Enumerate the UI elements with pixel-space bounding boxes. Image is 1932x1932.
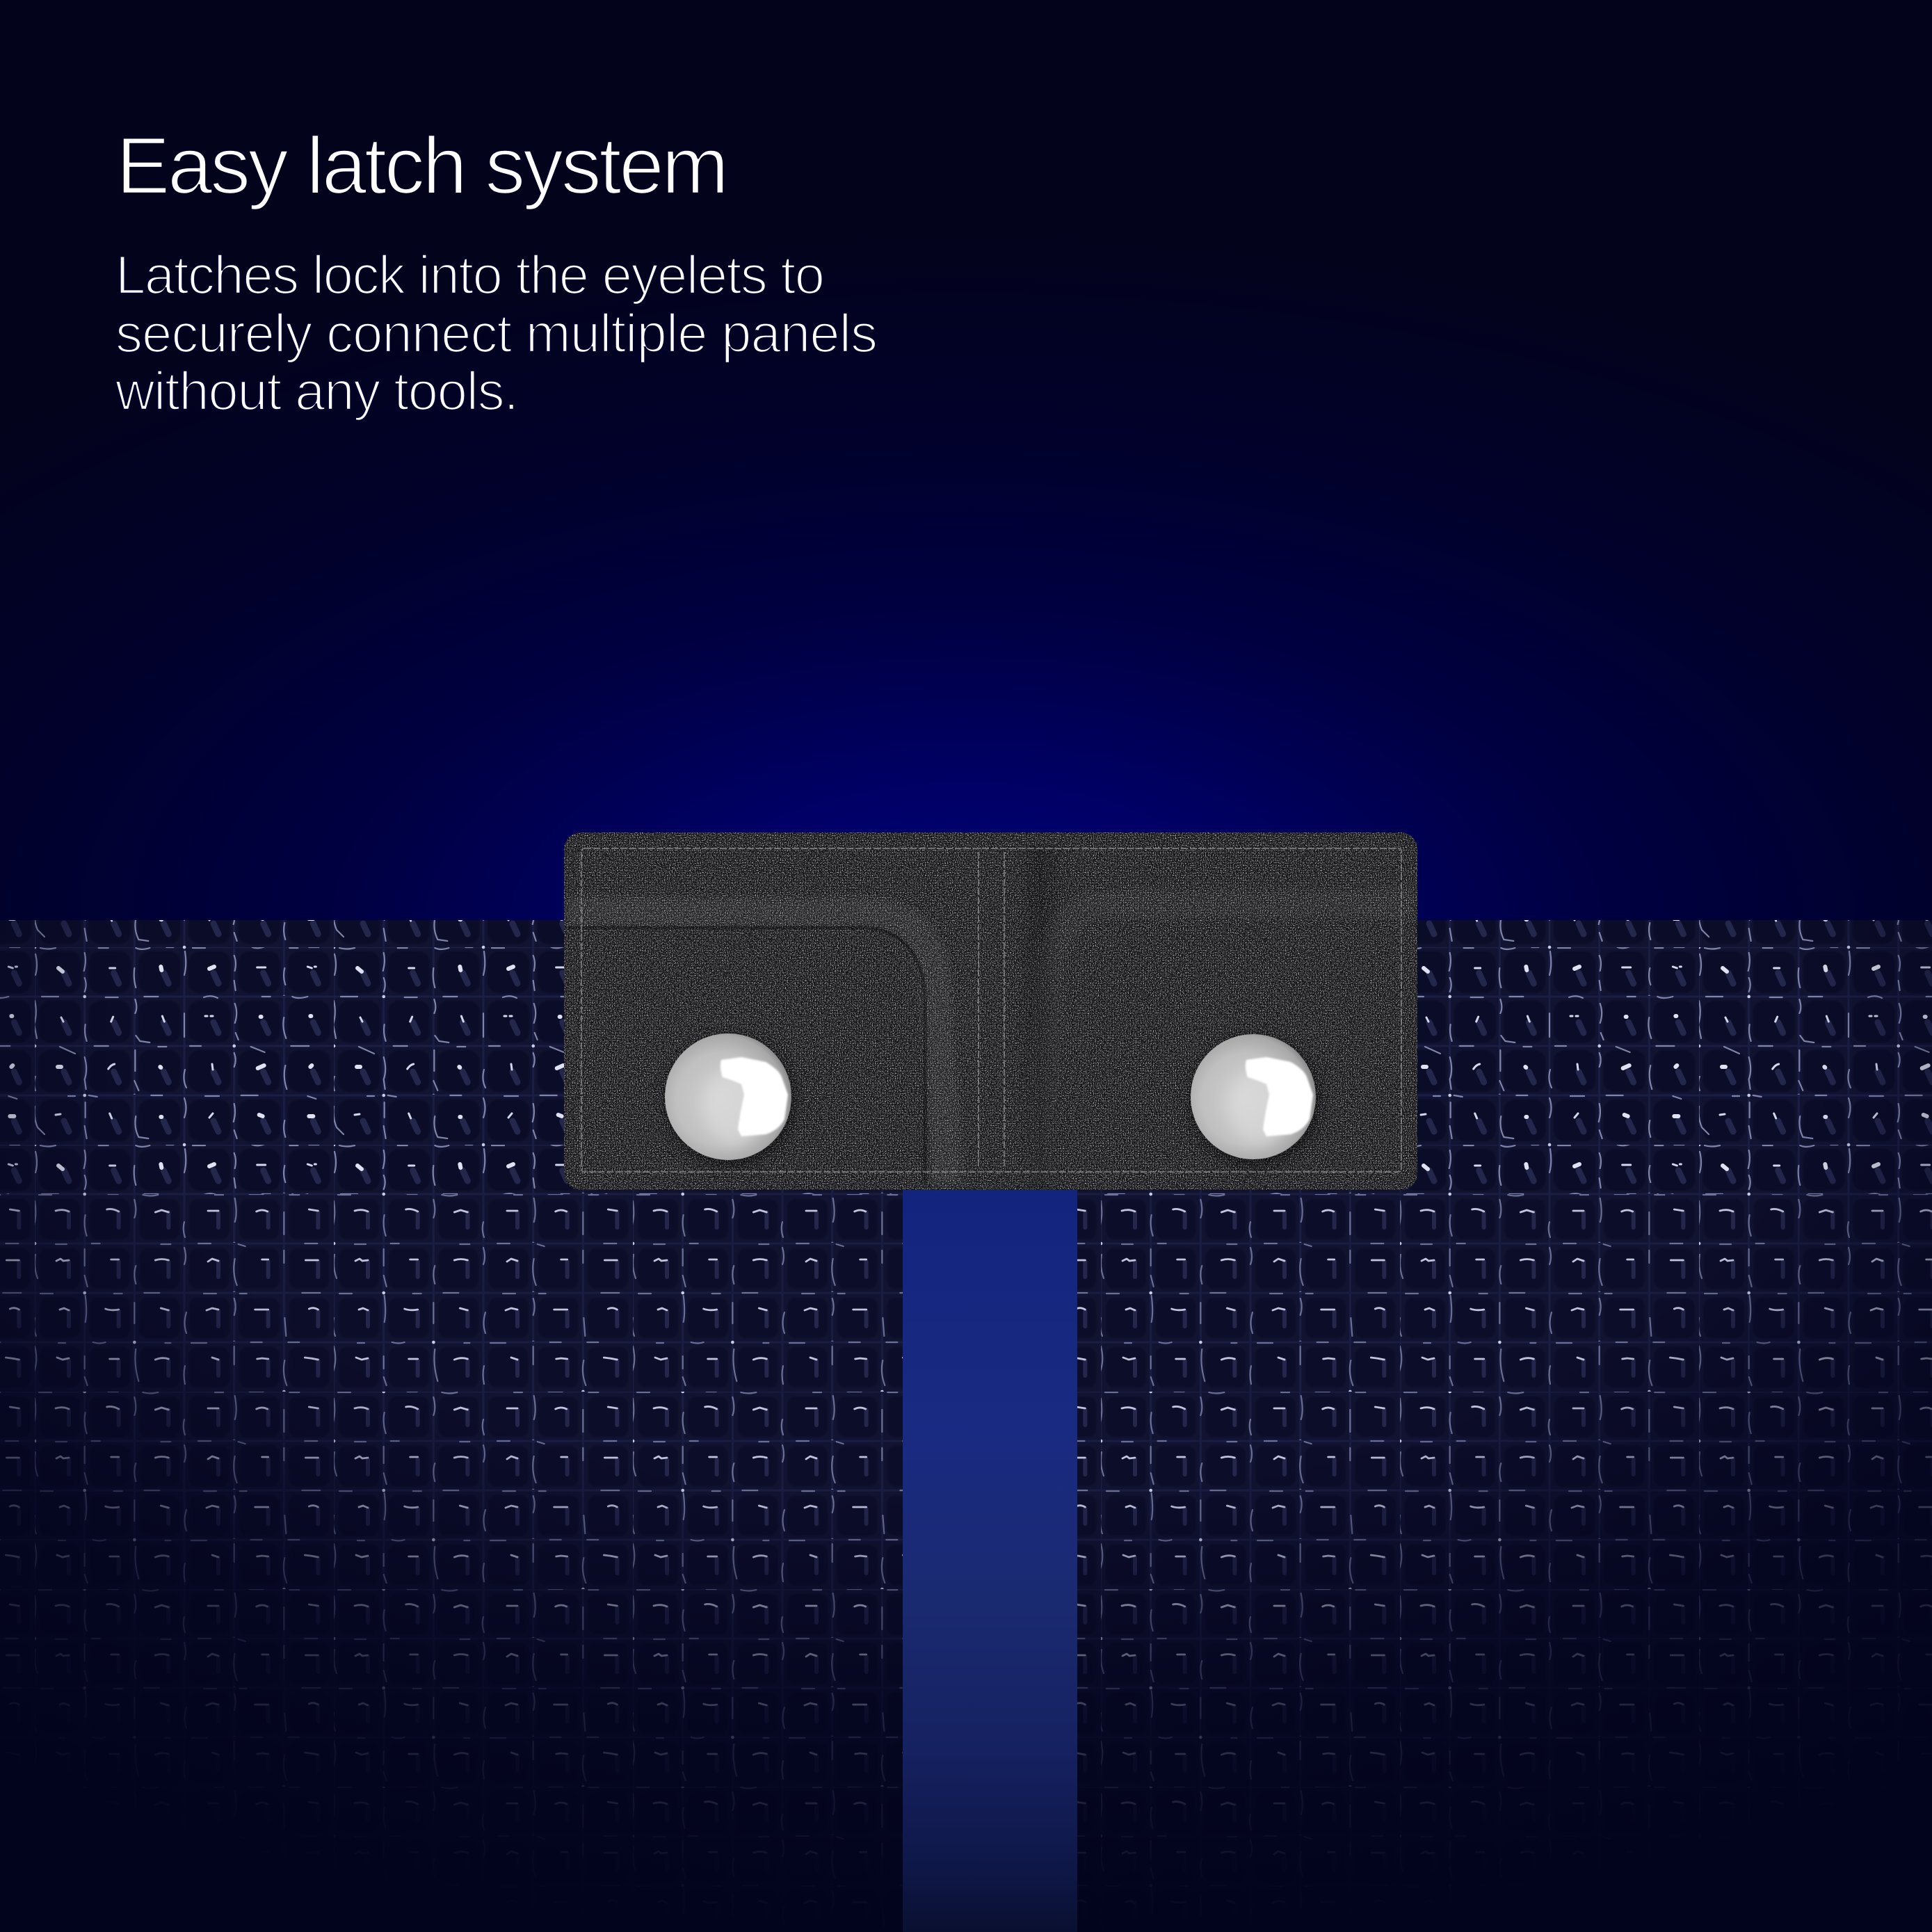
perimeter stitching <box>581 848 1401 1172</box>
vignette over the mat panels <box>0 920 1932 1932</box>
latch: fabric strap with two snaps <box>564 832 1417 1190</box>
left flap raised band <box>567 912 947 1186</box>
body text <box>115 244 878 421</box>
centre stitching left <box>978 852 979 1168</box>
latch fabric noise <box>564 832 1417 1190</box>
snap: right button <box>1191 1034 1319 1165</box>
latch fabric base <box>564 832 1417 1190</box>
title: Easy latch system <box>116 120 729 211</box>
body text: Latches lock into the eyelets to <box>115 244 825 305</box>
snap: left button <box>665 1033 794 1165</box>
mat panel: right textured panel <box>1077 920 1932 1932</box>
centre stitching right <box>1004 852 1005 1168</box>
gap: blue strip between panels <box>903 1190 1077 1932</box>
right flap raised band <box>1040 904 1415 1186</box>
body text: securely connect multiple panels <box>115 303 878 364</box>
latch weave texture <box>564 832 1417 1190</box>
left flap inner edge <box>567 928 925 1182</box>
fold shadow <box>1015 845 1064 1189</box>
body text: without any tools. <box>115 360 519 421</box>
mat panel: left textured panel <box>0 920 903 1932</box>
